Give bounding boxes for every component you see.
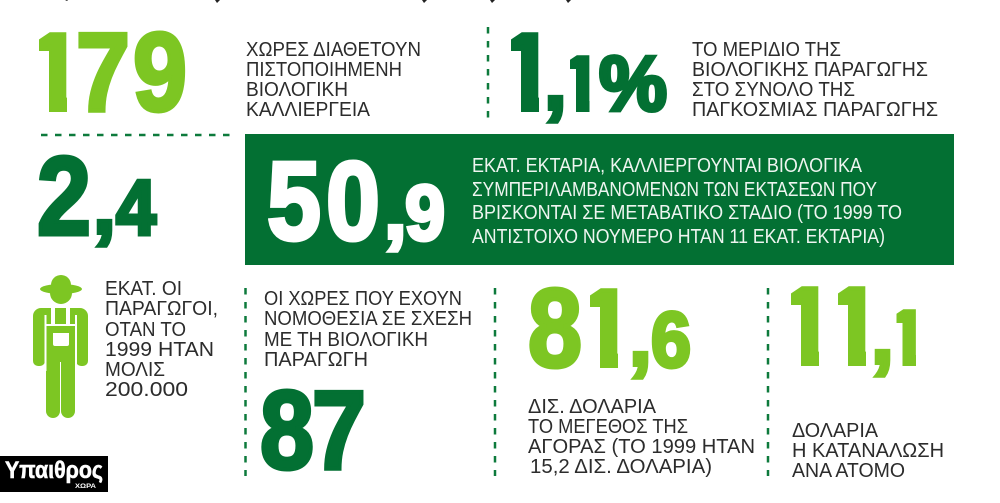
panel: 50,9 million hectares: 0 [326, 140, 380, 264]
stat: 11,1 dollars per person: , [871, 290, 894, 381]
stat: 2,4 million producers [37, 134, 156, 258]
caption: countries with legislation: ΝΟΜΟΘΕΣΙΑ ΣΕ ΣΧΕΣΗ [264, 308, 472, 330]
panel: 50,9 million hectares: 5 [267, 140, 321, 264]
stat: 179 countries: 7 [76, 10, 130, 134]
stat: 1,1% share: % [599, 40, 667, 128]
caption: consumption: Η ΚΑΤΑΝΑΛΩΣΗ [792, 440, 944, 462]
panel: 50,9 million hectares: , [384, 165, 407, 256]
caption: consumption [792, 420, 944, 482]
stat: 87 countries: 8 [260, 368, 314, 492]
stat: 2,4 million producers: 4 [116, 164, 156, 252]
stat: 2,4 million producers: , [93, 160, 116, 251]
stat: 1,1% share: 1 [496, 11, 556, 135]
caption: countries with legislation: ΟΙ ΧΩΡΕΣ ΠΟΥ ΕΧΟΥΝ [264, 288, 462, 310]
stat: 1,1% share: , [544, 36, 567, 127]
logo: Ypaithros Chora: Υπαιθρος [5, 457, 103, 484]
stat: 81,6 billion dollars: 6 [651, 296, 691, 384]
stat: 87 countries: 7 [312, 368, 366, 492]
caption: producers [105, 278, 218, 401]
caption: producers: ΕΚΑΤ. ΟΙ [105, 278, 182, 300]
caption: market size: ΤΟ ΜΕΓΕΘΟΣ ΤΗΣ [528, 416, 688, 438]
caption: producers: ΜΟΛΙΣ [105, 359, 165, 381]
stat: 81,6 billion dollars [528, 286, 754, 477]
caption: 1,1% share [692, 39, 938, 121]
caption: consumption: ΔΟΛΑΡΙΑ [792, 420, 879, 442]
stat: 11,1 dollars per person: 1 [886, 294, 928, 382]
panel: 50,9 million hectares [245, 134, 954, 265]
caption: 179 countries: ΧΩΡΕΣ ΔΙΑΘΕΤΟΥΝ [246, 39, 421, 61]
panel: 50,9 million hectares: 9 [405, 168, 445, 256]
caption: market size: ΔΙΣ. ΔΟΛΑΡΙΑ [528, 396, 657, 418]
caption: producers: 200.000 [105, 379, 188, 401]
stat: 179 countries [39, 30, 420, 116]
caption: 1,1% share: ΒΙΟΛΟΓΙΚΗΣ ΠΑΡΑΓΩΓΗΣ [692, 59, 928, 81]
panel text: ΒΡΙΣΚΟΝΤΑΙ ΣΕ ΜΕΤΑΒΑΤΙΚΟ ΣΤΑΔΙΟ (ΤΟ 1999 ΤΟ [472, 202, 902, 224]
stat: 11,1 dollars per person: 1 [776, 265, 836, 389]
panel text: ΑΝΤΙΣΤΟΙΧΟ ΝΟΥΜΕΡΟ ΗΤΑΝ 11 ΕΚΑΤ. ΕΚΤΑΡΙΑ) [472, 226, 885, 248]
stat: 81,6 billion dollars: 1 [575, 267, 635, 391]
stat: 87 countries [260, 368, 366, 492]
panel text: ΕΚΑΤ. ΕΚΤΑΡΙΑ, ΚΑΛΛΙΕΡΓΟΥΝΤΑΙ ΒΙΟΛΟΓΙΚΑ [472, 155, 863, 177]
caption: market size: 15,2 ΔΙΣ. ΔΟΛΑΡΙΑ) [530, 456, 712, 478]
stat: 1,1% share [511, 32, 938, 124]
caption: 179 countries: ΠΙΣΤΟΠΟΙΗΜΕΝΗ [246, 59, 402, 81]
stat: 11,1 dollars per person [791, 286, 942, 477]
caption: 179 countries: ΚΑΛΛΙΕΡΓΕΙΑ [246, 99, 371, 121]
stat: 179 countries: 9 [133, 10, 187, 134]
caption: market size: ΑΓΟΡΑΣ (ΤΟ 1999 ΗΤΑΝ [528, 436, 755, 458]
caption: producers: 1999 ΗΤΑΝ [105, 339, 214, 361]
logo: Ypaithros Chora: ΧΩΡΑ [75, 483, 96, 490]
stat: 1,1% share: 1 [559, 40, 602, 128]
caption: countries with legislation: ΜΕ ΤΗ ΒΙΟΛΟΓΙΚΗ [264, 329, 428, 351]
logo: Ypaithros Chora [0, 456, 108, 492]
caption: producers: ΟΤΑΝ ΤΟ [105, 319, 186, 341]
caption: market size [528, 396, 755, 478]
stat: 11,1 dollars per person: 1 [823, 265, 883, 389]
caption: 179 countries [246, 39, 421, 121]
caption: 1,1% share: ΣΤΟ ΣΥΝΟΛΟ ΤΗΣ [692, 79, 855, 101]
stat: 81,6 billion dollars: 8 [528, 266, 582, 390]
stat: 179 countries: 1 [24, 11, 84, 135]
caption: consumption: ΑΝΑ ΑΤΟΜΟ [792, 460, 905, 482]
caption: countries with legislation [264, 288, 472, 371]
caption: producers: ΠΑΡΑΓΩΓΟΙ, [105, 298, 218, 320]
stat: 81,6 billion dollars: , [629, 292, 652, 383]
stat: 2,4 million producers: 2 [37, 134, 91, 258]
caption: countries with legislation: ΠΑΡΑΓΩΓΗ [264, 349, 368, 371]
panel text [472, 155, 902, 248]
caption: 1,1% share: ΠΑΓΚΟΣΜΙΑΣ ΠΑΡΑΓΩΓΗΣ [692, 99, 938, 121]
caption: 1,1% share: ΤΟ ΜΕΡΙΔΙΟ ΤΗΣ [692, 39, 841, 61]
caption: 179 countries: ΒΙΟΛΟΓΙΚΗ [246, 79, 348, 101]
icon: farmer [33, 275, 88, 418]
panel text: ΣΥΜΠΕΡΙΛΑΜΒΑΝΟΜΕΝΩΝ ΤΩΝ ΕΚΤΑΣΕΩΝ ΠΟΥ [472, 179, 877, 201]
